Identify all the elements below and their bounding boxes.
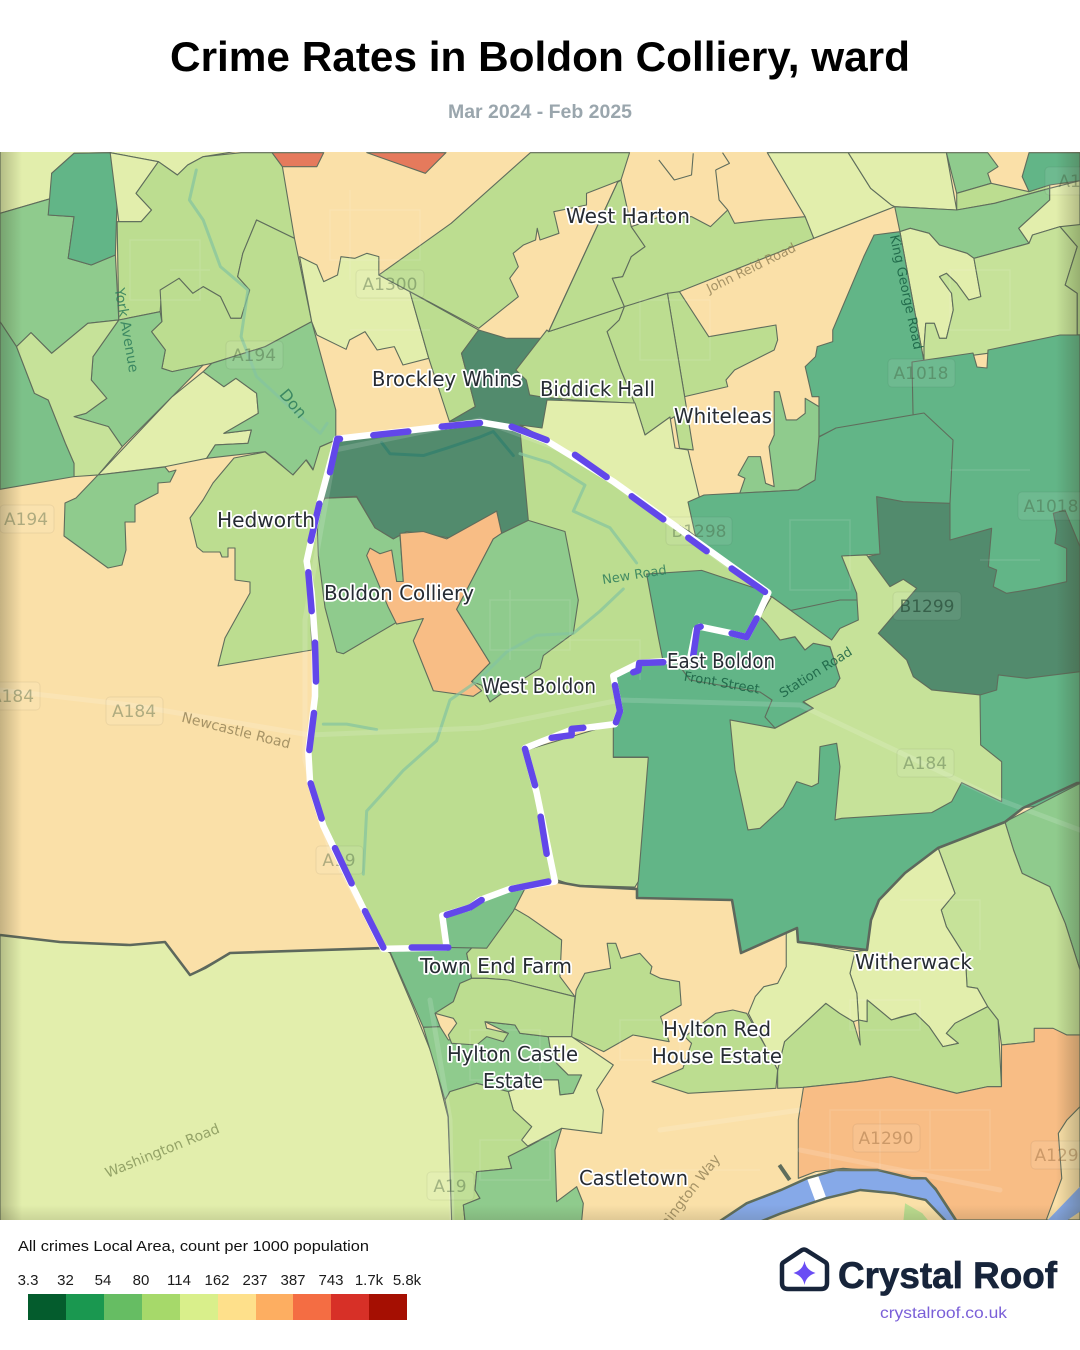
road name labels: Station Road bbox=[777, 645, 855, 701]
map areas: east green and dark blocks bbox=[613, 335, 1080, 953]
place name labels: Whiteleas bbox=[674, 404, 772, 428]
brand name: Crystal Roof bbox=[838, 1255, 1058, 1296]
road name labels: Washington Road bbox=[103, 1121, 222, 1182]
place name labels: Town End Farm bbox=[419, 954, 572, 978]
subtitle: date range: Mar 2024 - Feb 2025 bbox=[448, 102, 632, 123]
main roads and street texture bbox=[0, 190, 1080, 1220]
legend colour bar bbox=[28, 1294, 407, 1320]
road name labels: King George Road bbox=[886, 234, 925, 351]
ward interior areas bbox=[307, 422, 768, 949]
boundary details bbox=[549, 153, 729, 332]
title: Crime Rates in Boldon Colliery, ward bbox=[170, 33, 910, 80]
road name labels: Newcastle Road bbox=[180, 710, 292, 752]
legend scale numbers: 5.8k bbox=[393, 1272, 422, 1289]
place name labels: Hylton Red bbox=[663, 1017, 771, 1041]
legend scale numbers: 162 bbox=[204, 1272, 230, 1289]
brand url: crystalroof.co.uk bbox=[880, 1305, 1008, 1322]
road shields: A1290 bbox=[859, 1129, 913, 1149]
place name labels: Biddick Hall bbox=[540, 377, 655, 401]
road name labels: York Avenue bbox=[110, 286, 141, 374]
road shields: A194 bbox=[4, 510, 48, 530]
place name labels: Brockley Whins bbox=[372, 367, 522, 391]
place name labels bbox=[217, 204, 972, 1190]
road name labels bbox=[103, 234, 925, 1253]
road name labels: Front Street bbox=[683, 670, 761, 698]
place name labels: Witherwack bbox=[855, 950, 972, 974]
road shields: A19 bbox=[322, 851, 356, 871]
icon: Crystal Roof house logo bbox=[782, 1250, 827, 1289]
ward boundary: Boldon Colliery bbox=[307, 422, 768, 949]
road shields: B1298 bbox=[672, 522, 726, 542]
legend title: All crimes Local Area, count per 1000 population bbox=[18, 1238, 369, 1255]
road name labels: Don bbox=[276, 385, 311, 422]
map edge shading bbox=[0, 152, 1080, 1220]
road shields: A1018 bbox=[1024, 497, 1078, 517]
place name labels: West Harton bbox=[566, 204, 690, 228]
road name labels: John Reid Road bbox=[703, 241, 799, 297]
river Wear bbox=[719, 1165, 1080, 1222]
road shields: A1300 bbox=[363, 275, 417, 295]
map areas: south-east bbox=[571, 783, 1080, 1220]
legend scale numbers: 54 bbox=[95, 1272, 111, 1289]
place name labels: Estate bbox=[483, 1069, 543, 1093]
bold authority boundary east bbox=[552, 783, 1080, 953]
place name labels: Boldon Colliery bbox=[324, 581, 474, 605]
bold authority boundary bbox=[0, 935, 383, 975]
legend scale numbers: 237 bbox=[242, 1272, 268, 1289]
map areas: south-west pale zone bbox=[0, 935, 452, 1222]
road shields: B1299 bbox=[900, 597, 954, 617]
road name labels: New Road bbox=[601, 563, 668, 588]
map areas: pale zone north of ward bbox=[520, 400, 700, 536]
place name labels: Hylton Castle bbox=[447, 1042, 578, 1066]
map areas: east dark and Station Road zone bbox=[730, 497, 1080, 830]
legend scale numbers: 743 bbox=[318, 1272, 344, 1289]
place name labels: East Boldon bbox=[667, 649, 775, 673]
legend scale numbers: 32 bbox=[57, 1272, 74, 1289]
road shields: A194 bbox=[232, 346, 276, 366]
streams bbox=[189, 170, 637, 874]
place name labels: House Estate bbox=[652, 1044, 782, 1068]
map areas: Hedworth bbox=[64, 440, 336, 666]
place name labels: Castletown bbox=[579, 1166, 688, 1190]
map areas: south-centre bbox=[390, 905, 613, 1221]
map areas: north-east bbox=[516, 153, 1080, 493]
legend scale numbers: 387 bbox=[280, 1272, 306, 1289]
place name labels: Hedworth bbox=[217, 508, 315, 532]
place name labels: West Boldon bbox=[482, 674, 596, 698]
road shields: A184 bbox=[903, 754, 947, 774]
road shields: A1018 bbox=[894, 364, 948, 384]
map areas: north-west bbox=[0, 150, 630, 489]
road shields: A19 bbox=[433, 1177, 467, 1197]
road shields bbox=[0, 167, 1080, 1200]
road name labels: Washington Way bbox=[640, 1152, 724, 1253]
legend scale numbers: 114 bbox=[167, 1272, 191, 1289]
legend scale numbers: 3.3 bbox=[18, 1272, 38, 1289]
road shields: A184 bbox=[112, 702, 156, 722]
legend scale numbers bbox=[18, 1272, 422, 1289]
legend scale numbers: 80 bbox=[133, 1272, 149, 1289]
legend scale numbers: 1.7k bbox=[355, 1272, 384, 1289]
